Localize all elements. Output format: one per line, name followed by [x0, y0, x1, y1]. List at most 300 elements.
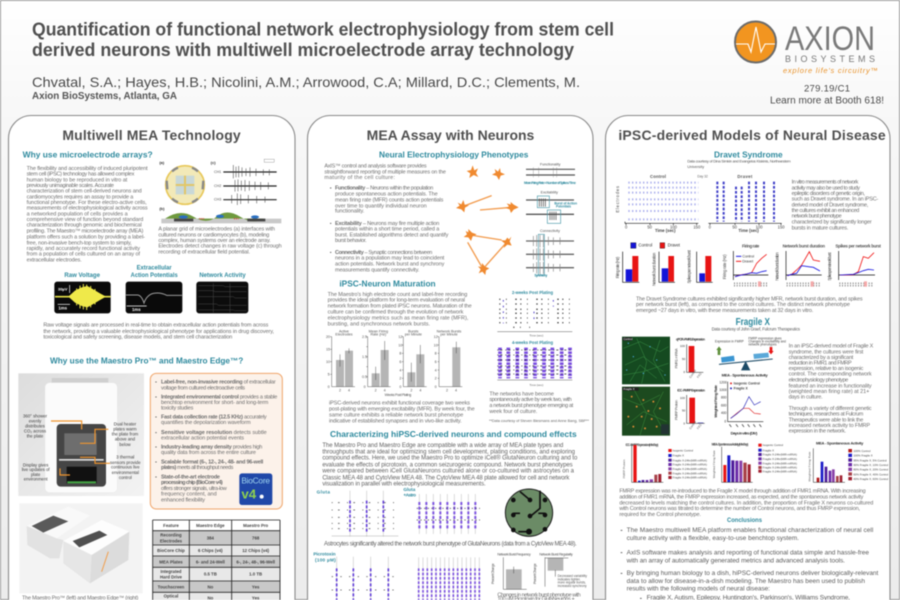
chart: spontaneous activity rescue bars: Weighted Firing Rate — [712, 450, 716, 478]
axis label: weeks post plating: Weeks Post Plating — [385, 393, 411, 397]
chart: bursts per minute: 0 — [399, 385, 401, 389]
figure: functionality trace: Functionality — [540, 162, 561, 166]
table: feature comparison: Touchscreen — [158, 584, 185, 589]
bullet list of benefits: Integrated environmental control provides a stable — [161, 394, 277, 400]
chart: mixed culture activity bars: 95% Fragile X, 5% Control — [853, 458, 887, 462]
table: feature comparison: BioCore Chip — [157, 548, 185, 553]
chart: network burst frequency: Network Burst Frequency — [497, 552, 531, 556]
callout: Maestro benefits — [150, 373, 282, 509]
chart: network burst frequency: Percent Change — [491, 563, 495, 584]
text block: raw voltage caption: the network, providing a valuable electrophysiological phenotype for applications in drug discovery, — [43, 329, 274, 335]
chart: FMRP rescue bars: Fragile X-24hr(MIR-mRNA) — [673, 458, 707, 462]
figure: annotated Maestro device: 3 thermal — [116, 455, 134, 460]
subheading: maturation: iPSC-Neuron Maturation — [339, 279, 436, 289]
Fragile X section — [622, 296, 874, 436]
chart: network burst frequency — [491, 552, 531, 589]
text block: Fragile X description: Through a variety of different genetic — [789, 406, 872, 412]
chart: spikes per burst over time: Spikes per network burst — [835, 244, 882, 249]
legend: control and Dravet: Dravet — [668, 243, 681, 248]
text block: conclusions: The Maestro multiwell MEA platform enables functional characterization of neural cell — [627, 527, 873, 534]
figure: voltage traces c: CH3 — [214, 198, 221, 202]
chart: bursts per minute: 2 — [410, 388, 412, 392]
text block: phenotypes: measurements quantify connectivity. — [335, 267, 420, 273]
text block: phenotypes: mean firing rate (MFR) counts action potentials — [335, 198, 444, 204]
chart: weighted firing rate over time: 1000 — [719, 388, 727, 392]
text block: compound effects — [321, 443, 578, 488]
chart: raster at 2 weeks — [497, 290, 572, 338]
chart: firing rate over time: Firing rate (Hz) — [722, 254, 727, 279]
table: feature comparison: Integrated — [161, 569, 182, 574]
logo: Axion BioSystems: AXION — [785, 20, 875, 58]
chart: control raster: Day 32 — [697, 174, 708, 178]
text block: conclusions: By bringing human biology to a dish, hiPSC-derived neurons deliver biologically-relevant — [627, 570, 879, 577]
figure: annotated Maestro device: control — [119, 475, 132, 480]
text block: maturation intro: culture can be confirmed through the evolution of network — [328, 310, 464, 316]
text block: rescue description: with Control neurons was titrated to determine the number of Control neurons, and thus FMRP expression, — [618, 506, 860, 512]
bullet list of benefits: State-of-the-art electrode — [161, 474, 220, 480]
text block: compound effects: Classic MEA 48 and CytoView MEA 48. The CytoView MEA 48 plate allowed for cell and network — [322, 475, 569, 481]
bullet list of benefits: quality data from across the entire culture — [161, 450, 256, 456]
image: isogenic control micrograph: Control — [623, 337, 633, 341]
table: feature comparison: Maestro Edge — [196, 523, 225, 528]
chart: active electrodes: Active — [339, 329, 349, 333]
table: feature comparison: 1.0 TB — [249, 572, 262, 577]
table: feature comparison: 768 — [252, 536, 260, 541]
chart: active electrodes: 4 — [348, 388, 350, 392]
text block: Fragile X description: increased network activity to FMRP — [789, 423, 870, 429]
label: Gluta plus Astro: +Astro — [403, 493, 416, 498]
chart: weighted firing rate over time: Weighted Firing Rate — [714, 385, 718, 418]
bullet list of benefits: quantifies the depolarization waveform — [161, 420, 251, 426]
chart: mean firing rate: Mean Firing — [369, 329, 388, 333]
chart: network bursts per minute: Network Bursts — [437, 329, 462, 333]
chart: active electrodes: 20 — [326, 335, 330, 339]
chart: bursts per minute: 8 — [399, 352, 401, 356]
text block: conclusions: culture activity with a flexible, easy-to-use benchtop system. — [627, 535, 799, 542]
text block: phenotypes: potentials within a short time period, called a — [335, 227, 440, 233]
label: Gluta plus Astro: Gluta — [403, 487, 416, 492]
text block: network maturation: The networks have become — [489, 392, 554, 398]
text block: conclusions — [621, 527, 879, 600]
label: Picrotoxin: Picrotoxin — [313, 551, 336, 556]
text block: introduction — [27, 166, 148, 264]
chart: spontaneous activity rescue bars: Fragile X-24hr(MIR-mRNA) — [763, 453, 797, 457]
poster number and booth: Learn more at Booth 618! — [770, 96, 884, 106]
text block: phenotypes: produce spontaneous action potentials. The — [335, 192, 438, 198]
label: extracellular action potentials — [131, 265, 178, 279]
chart: bursts per minute: 6 — [399, 360, 401, 364]
table: feature comparison: Electrodes — [160, 538, 183, 543]
chart: qPCR FMR1 expression: 0 — [683, 370, 685, 374]
text block: Fragile X description: syndrome, the cultures were first — [789, 349, 864, 355]
text block: phenotypes: functionality. — [335, 209, 365, 215]
text block: introduction: previously unimaginable scales. Accurate — [27, 183, 114, 189]
chart: Picrotoxin raster on Gluta — [332, 557, 398, 600]
chart: mixed culture activity bars — [808, 441, 889, 482]
icon: balance scale — [715, 336, 786, 370]
chart: Dravet raster: Dravet — [737, 174, 753, 179]
subheading: Conclusions: Conclusions — [727, 518, 763, 524]
figure: annotated Maestro device: environmental — [112, 470, 139, 475]
text block: Fragile X description: techniques, researchers at Fulcrum — [789, 412, 864, 418]
chart: network bursts per minute: 2 — [446, 388, 448, 392]
text block: network maturation: a network burst phenotype emerging at — [489, 403, 574, 409]
icon: orange pulse circle — [735, 22, 776, 62]
chart: spontaneous activity rescue bars: Fragile X-24hr(MIR-mRNA) — [763, 466, 797, 470]
bullet list of benefits: Label-free, non-invasive recording of extracellular — [161, 379, 276, 385]
bullet list of benefits: enhanced flexibility — [161, 497, 205, 503]
chart: ICC FMRP expression: ICC - FMRP Expression — [677, 389, 705, 393]
text block: burst phenotype caption: Changes in network burst phenotype with — [497, 592, 581, 598]
text block: phenotypes: burst behavior. — [335, 238, 367, 244]
text block: Dravet description: activity may also be used to study — [792, 185, 860, 191]
label: raw voltage: Raw Voltage — [64, 272, 100, 279]
chart: Dravet raster: 0 — [709, 225, 712, 230]
chart: network activity traces — [196, 282, 248, 313]
chart: Dravet raster: Time (sec) — [738, 228, 759, 233]
icon: balance scale: network phenotypes — [748, 342, 777, 346]
chart: qPCR FMR1 expression: Control — [688, 368, 697, 379]
chart: Picrotoxin raster on Gluta plus Astro — [419, 557, 479, 600]
heading: iPSC-derived Models of Neural Disease — [618, 127, 886, 143]
text block: conclusions: AxIS software makes analysis and reporting of functional data simple and hassle-free — [627, 549, 869, 556]
figure: functionality trace — [524, 162, 576, 185]
chart: spontaneous activity rescue bars: MEA - Spontaneous Activity (Mix Exp) — [712, 442, 748, 446]
text block: Dravet findings: The Dravet Syndrome cultures exhibited significantly higher MFR, network burst duration, and spikes — [636, 296, 863, 302]
chart: active electrodes: 5 — [328, 373, 330, 377]
chart: raw voltage trace: 1ms — [58, 306, 68, 311]
chart: spikes per burst over time: Spikes per network burst — [827, 251, 832, 281]
figure: annotated Maestro device: Dual heater — [114, 421, 137, 426]
chart: bursts per minute: 2 — [399, 377, 401, 381]
panel: Multiwell MEA Technology — [8, 116, 295, 600]
figure: annotated Maestro device: Display gives — [23, 462, 48, 467]
logo: Axion BioSystems — [735, 20, 878, 75]
poster number and booth: 279.19/C1 — [804, 84, 850, 94]
bullet list of benefits — [155, 379, 277, 503]
text block: introduction: characterization of stem cell-derived neurons and — [27, 189, 142, 195]
figure: electrode grid a: (a) — [159, 160, 165, 165]
text block: Fragile X description: In an iPSC-derived model of Fragile X — [789, 343, 874, 349]
figure: annotated Maestro device: below — [119, 442, 132, 447]
chart: mixed culture activity bars: 100% Control — [853, 449, 871, 453]
chart: spontaneous activity rescue bars: Fragile X-24hr(MIR-mRNA) — [763, 457, 797, 461]
chart: weighted firing rate over time: 800 — [721, 396, 727, 400]
compound effects section — [313, 443, 587, 600]
text block: Dravet description: bursts in mature cultures. — [792, 225, 849, 231]
text block: network maturation — [488, 392, 574, 415]
figure: electrode grid a — [159, 160, 204, 204]
figure: voltage traces c: (c) — [211, 160, 216, 165]
text block: rescue description: FMRP expression was re-introduced to the Fragile X model through addition of FMR1 mRNA. With increasing — [619, 489, 866, 495]
chart: spikes per burst bars — [687, 249, 713, 283]
text block: Fragile X description: expression in the network. — [789, 428, 846, 434]
chart: control raster: Time (sec) — [655, 228, 676, 233]
header: title and authors — [32, 20, 614, 102]
label: Picrotoxin — [313, 551, 336, 563]
text block: introduction: extracellular electrodes. — [27, 258, 82, 264]
chart: weighted firing rate over time: 600 — [721, 403, 727, 407]
chart: bursts per minute: 12 — [398, 335, 402, 339]
chart: FMRP rescue bars: Fragile X-24hr(MIR-mRNA) — [673, 476, 707, 480]
text block: Fragile X description: expression, relative to an isogenic — [789, 366, 864, 372]
lower part of panel one — [18, 356, 282, 600]
chart: FMRP rescue bars: Fragile X-24hr(MIR-mRNA) — [673, 471, 707, 475]
image: Fragile X micrograph: Fragile X — [623, 387, 635, 391]
chart: mixed culture activity bars: 90% Fragile X, 10% Control — [853, 463, 889, 467]
chart: weighted firing rate over time — [714, 380, 763, 435]
chart: weighted firing rate over time: Isogenic Control — [734, 381, 760, 385]
text block: conclusions: results with the following models of neural disease: — [627, 586, 770, 593]
chart: mean firing rate: 2 — [375, 388, 377, 392]
text block: Dravet description: network burst phenotype — [792, 214, 842, 220]
figure: annotated Maestro device: evenly — [29, 418, 42, 423]
text block: maturation intro — [328, 292, 472, 327]
chart: spontaneous activity rescue bars: Fragile X — [763, 448, 774, 452]
label: Gluta: Gluta — [317, 490, 330, 495]
table: feature comparison: 6-, 24-, 48-, 96-Well — [236, 559, 275, 564]
icon: connected orange neurons — [456, 165, 519, 275]
heading: Multiwell MEA Technology — [62, 127, 241, 143]
text block: figure caption: A planar grid of microelectrodes (a) interfaces with — [158, 226, 275, 232]
chart: ICC FMRP expression: FXS — [696, 423, 702, 430]
text block: introduction: free, non-invasive bench-top system to simply, — [27, 240, 132, 246]
table: feature comparison: 12 Chips (v4) — [242, 548, 270, 553]
chart: network bursts per minute: per Minute — [440, 333, 458, 337]
text block: introduction: rapidly, and accurately record functional activity — [27, 246, 140, 252]
figure: excitability trace: Potentials — [556, 205, 571, 209]
text block: Fragile X description — [789, 343, 874, 434]
chart: raw voltage trace: 30µV — [58, 287, 68, 292]
figure: annotated Maestro device: above and — [115, 437, 136, 442]
text block: maturation intro: network formation from plated iPSC neurons. Maturation of the — [328, 303, 472, 309]
chart: ICC FMRP expression: 50 — [682, 409, 686, 413]
chart: network bursts per minute: 8 — [435, 352, 437, 356]
chart: burst duration over time: Network burst duration — [783, 244, 825, 249]
chart: network bursts per minute — [434, 329, 462, 392]
chart: network bursts per minute: 4 — [435, 368, 437, 372]
text block: maturation intro: provides the ideal platform for long-term evaluation of neural — [328, 298, 465, 304]
note: Fragile X data courtesy: Data courtesy of John Graef, Fulcrum Therapeutics — [712, 326, 800, 331]
chart: network burst regularity: Decreased variability — [558, 574, 587, 578]
chart: raster at 2 weeks: 2-weeks Post Plating — [512, 290, 553, 295]
icon: BioCore v4 badge: BioCore — [241, 476, 270, 486]
note: Dravet data courtesy — [687, 160, 791, 169]
text block: maturation findings: indicative of established synapses and in vivo-like activity. — [329, 418, 462, 424]
figure: annotated Maestro device: sensors provide — [110, 460, 141, 465]
figure: annotated Maestro device: continuous live — [111, 465, 140, 470]
authors: Chvatal, S.A.; Hayes, H.B.; Nicolini, A.M.; Arrowood, C.A; Millard, D.C.; Clements, M. — [32, 74, 580, 90]
text block: compound effects: visualization in parallel with electrophysiological measurements. — [322, 482, 486, 488]
text block: Fragile X description: featured an increase in functionality — [789, 383, 872, 389]
text block: Dravet description — [792, 180, 879, 231]
panel: iPSC-derived Models of Neural Disease — [606, 116, 890, 600]
chart: active electrodes: 15 — [326, 348, 330, 352]
chart: FMRP rescue bars: Fragile X-24hr(MIR-mRNA) — [673, 467, 707, 471]
table: feature comparison: Maestro Pro — [243, 523, 269, 528]
label: MEA spontaneous activity: MEA - Spontaneous Activity — [722, 372, 768, 377]
chart: network bursts per minute: 4 — [455, 388, 457, 392]
chart: FMRP rescue bars: Fragile X — [673, 454, 684, 458]
text block: introduction: human biology to be reproduced in vitro at — [27, 177, 128, 183]
image: Fragile X micrograph — [622, 387, 670, 436]
chart: burst duration over time: Network burst duration — [774, 252, 779, 281]
subheading: Dravet Syndrome: Dravet Syndrome — [714, 151, 783, 160]
chart: burst duration over time — [774, 244, 825, 287]
label: Gluta plus Astro — [403, 487, 416, 498]
text block: Fragile X description: Therapeutics were able to link the — [789, 417, 863, 423]
text block: figure caption: Electrodes detect changes in raw voltage (c) through — [158, 244, 282, 250]
text block: compound effects: evaluate the effects of picrotoxin, a common seizurogenic compound. Network burst phenotypes — [322, 462, 573, 468]
legend: control and Dravet: Control — [638, 243, 652, 248]
text block: figure caption — [158, 226, 282, 255]
chart: spontaneous activity rescue bars: Isogenic Control — [763, 443, 783, 447]
chart: bursts per minute — [398, 329, 427, 392]
figure: voltage traces c — [211, 159, 277, 205]
chart: mixed culture activity bars: MEA - Spontaneous Activity — [816, 441, 864, 446]
chart: network burst regularity: more regular bursts, — [558, 581, 586, 585]
chart: network burst regularity: Percent Change — [533, 563, 537, 584]
chart: FMRP rescue bars: Fragile X-24hr(MIR-mRNA) — [673, 463, 707, 467]
chart: qPCR FMR1 expression — [674, 337, 705, 379]
chart: bursts per minute: per Minute — [405, 333, 422, 337]
chart: ICC FMRP expression — [674, 389, 705, 430]
table: feature comparison — [153, 520, 280, 600]
figure: excitability trace: Excitability — [541, 191, 558, 195]
chart: Gluta raster — [332, 491, 398, 537]
text block: phenotypes: Functionality – Neurons within the population — [335, 186, 433, 192]
chart: qPCR FMR1 expression: qPCR - FMR1 Expression — [676, 337, 705, 341]
chart: raster at 4 weeks — [497, 340, 572, 387]
bullet list of benefits: Scalable format (6-, 12-, 24-, 48- and 96-well — [161, 459, 264, 465]
text block: figure caption: cultured neurons or cardiomyocytes (b), modeling — [158, 232, 269, 238]
text block: introduction: The flexibility and accessibility of induced pluripotent — [27, 166, 148, 172]
text block: Fragile X description: reduction in FMR1 and FMRP — [789, 361, 852, 367]
chart: Dravet raster: 50 — [732, 225, 738, 230]
chart: network bursts per minute: 12 — [434, 335, 438, 339]
subheading: compound effects: Characterizing hiPSC-derived neurons and compound effects — [330, 429, 577, 439]
bullet list of benefits: benchtop environment for short- and long-term — [161, 400, 269, 406]
chart: mixed culture activity bars: 60% Fragile X, 40% Control — [853, 472, 889, 476]
text block: phenotypes: burst. Established algorithms detect and quantify — [335, 232, 449, 238]
text block: Fragile X description: (weighted mean firing rate) at 21+ — [789, 389, 869, 395]
text block: Fragile X description: characterized by a significant — [789, 355, 854, 361]
legend: control and Dravet — [631, 243, 681, 248]
text block: compound effects: The Maestro Pro and Maestro Edge are compatible with a wide array of MEA plate types and — [322, 443, 563, 449]
chart: spontaneous activity rescue bars: Fragile X-24hr(MIR-mRNA) — [763, 461, 797, 465]
chart: active electrodes: Electrodes — [335, 333, 353, 337]
Dravet section — [615, 127, 886, 287]
chart: control raster: Electrodes — [615, 186, 620, 213]
poster number and booth — [770, 84, 884, 106]
table: feature comparison: Yes — [252, 584, 260, 589]
chart: mean firing rate: 0 — [364, 385, 366, 389]
chart: network burst regularity: Network Burst Regularity — [539, 552, 573, 556]
figure: Maestro Pro and Edge devices — [19, 503, 143, 593]
chart: weighted firing rate over time: 0 — [724, 419, 726, 423]
chart: ICC FMRP expression: Control — [688, 420, 697, 430]
chart: raster at 4 weeks: 4-weeks Post Plating — [512, 340, 553, 345]
figure: annotated Maestro device: the plate from — [112, 432, 139, 437]
chart: FMRP rescue bars: Isogenic Control — [673, 449, 693, 453]
text block: phenotypes: Excitability – Neurons may fire multiple action — [335, 221, 439, 227]
chart: active electrodes: 2 — [339, 388, 341, 392]
text block: rescue description: required for the Control phenotype. — [619, 512, 701, 518]
label: extracellular action potentials: Action Potentials — [131, 272, 178, 279]
text block: Dravet findings — [636, 296, 863, 314]
text block: Dravet description: characterized by significantly longer — [792, 219, 872, 225]
subheading: Maestro: Why use the Maestro Pro™ and Maestro Edge™? — [50, 356, 243, 365]
chart: firing rate bars — [615, 252, 639, 282]
chart: bursts per minute: 10 — [398, 343, 402, 347]
icon: balance scale: Changes in excitability and — [748, 339, 786, 343]
text block: Fragile X description: electrophysiology phenotype — [789, 378, 848, 384]
chart: mixed culture activity bars: 40% Fragile X, 60% Control — [853, 477, 889, 481]
figure: annotated Maestro device: distributes — [25, 423, 45, 428]
chart: control raster: 50 — [647, 225, 653, 230]
figure: excitability trace: Burst of Action — [554, 201, 577, 205]
bullet list of benefits: Fast data collection rate (12.5 KHz) accurately — [161, 414, 267, 420]
table: feature comparison: No — [207, 584, 214, 589]
text block: rescue description: decreased to levels matching the control cultures. In addition, the proportion of Fragile X neurons co-cultured — [619, 500, 873, 506]
figure: neuron cross-section b: (b) — [159, 206, 165, 211]
subheading: Fragile X: Fragile X — [736, 317, 770, 328]
chart: Dravet raster: 150 — [778, 225, 785, 230]
text block: introduction: comprehensive view of function beyond standard — [27, 217, 143, 223]
chart: Gluta plus Astro raster — [417, 494, 480, 534]
note: Dravet data courtesy: University — [687, 165, 704, 169]
text block: conclusions: data to allow for disease-in-a-dish modeling. The Maestro has been used to publish — [627, 578, 865, 585]
chart: weighted firing rate over time: Days in vitro (DIV) — [731, 430, 758, 435]
chart: network bursts per minute: 6 — [435, 360, 437, 364]
chart: active electrodes: 0 — [328, 385, 330, 389]
chart: bursts per minute: 4 — [399, 368, 401, 372]
logo: Axion BioSystems: explore life's circuitry™ — [783, 66, 878, 75]
phenotypes section — [324, 127, 577, 277]
text block: phenotypes: maturity of the cell culture: — [324, 175, 395, 181]
chart: action potential waveform — [126, 282, 182, 313]
bullet list of benefits: toxicity studies — [161, 406, 194, 412]
text block: maturation intro: bursting, and synchronous network bursts. — [328, 321, 430, 327]
text block: introduction: characterization through genomic and biochemical — [27, 223, 142, 229]
chart: spontaneous activity rescue bars — [712, 442, 797, 482]
label: network activity: Network Activity — [199, 272, 246, 279]
chart: burst duration bars — [652, 252, 675, 286]
text block: raw voltage caption — [43, 323, 274, 340]
chart: FMRP rescue bars — [622, 443, 707, 482]
chart: mean firing rate: Rate (Hz) — [371, 333, 386, 337]
chart: ICC FMRP expression: 100 — [680, 396, 685, 400]
chart: qPCR FMR1 expression: 100 — [680, 344, 685, 348]
chart: Dravet raster — [708, 174, 785, 233]
text block: figure caption: recording of extracellular field potential. — [158, 249, 250, 255]
chart: raw voltage trace — [54, 282, 111, 313]
figure: excitability trace — [526, 191, 577, 223]
figure: green CytoView well image — [505, 489, 553, 536]
chart: weighted firing rate over time: Fragile X — [734, 386, 749, 390]
chart: network bursts per minute: 2 — [435, 377, 437, 381]
title — [32, 20, 614, 60]
chart: network bursts per minute: 0 — [435, 385, 437, 389]
figure: annotated Maestro device: 360° shower — [23, 413, 48, 418]
text block: compound effects: compound effects. Here, we used the Maestro Pro to optimize iCell® GlutaNeuron culturing and to — [322, 455, 578, 462]
chart: FMRP rescue bars: FMRP Protein — [622, 459, 626, 478]
upper part of panel one — [23, 127, 282, 340]
text block: raw voltage caption: Raw voltage signals are processed in real-time to obtain extracellular action potentials from across — [43, 323, 269, 329]
chart: ICC FMRP expression: 0 — [683, 421, 685, 425]
text block: raw voltage caption: toxicological and safety screening, disease models, and stem cell characterization — [43, 334, 232, 340]
figure: voltage traces c: CH2 — [214, 184, 221, 188]
